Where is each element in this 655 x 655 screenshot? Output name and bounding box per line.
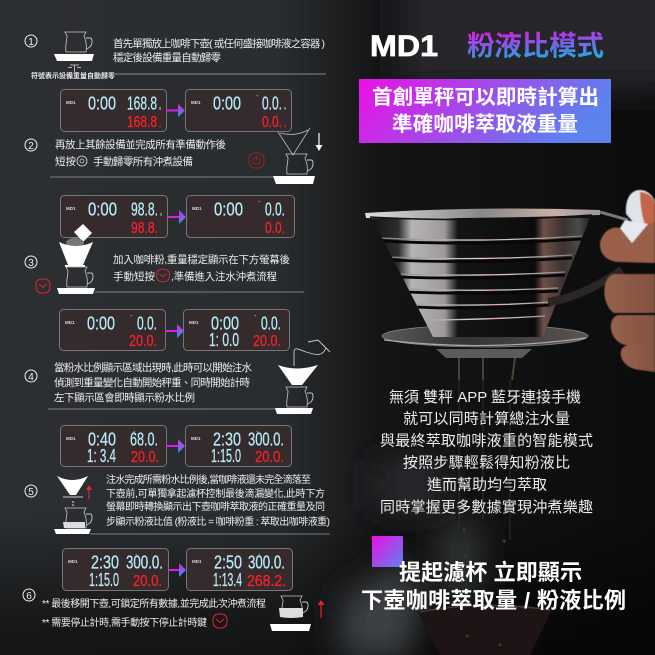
display: after: 268.2. (247, 573, 286, 590)
display: after (184, 310, 290, 350)
dripper cone (372, 218, 590, 337)
step 2 text: 再放上其餘設備並完成所有準備動作後 (55, 138, 226, 151)
display: before: 1:15.0 (89, 570, 119, 590)
banner (359, 79, 611, 143)
step 5 text (106, 473, 330, 528)
display: before: 0.0. (137, 314, 157, 334)
display: after: + (254, 313, 257, 318)
callout: lift dripper: 提起濾杯 立即顯示 (399, 560, 582, 585)
step 5 text: 下壺前,可單獨拿起濾杯控制最後滴漏變化,此時下方 (106, 487, 325, 500)
step 2 text (55, 138, 226, 168)
display: before: 0:40 (88, 430, 116, 450)
step 4 text: 偵測到重量變化自動開始秤重、同時開始計時 (54, 376, 250, 389)
dripper stems (459, 358, 515, 380)
display: after: g (284, 105, 286, 110)
display: before (62, 548, 168, 590)
display: after: 0:00 (213, 94, 241, 114)
display: before: g (159, 123, 161, 128)
display: before: 98.8. (131, 200, 158, 220)
step 6 text: ** 需要停止計時,需手動按下停止計時鍵 (42, 616, 207, 629)
display: after (186, 548, 292, 590)
display: after: 0:00 (214, 200, 243, 220)
display: after: 300.0. (248, 552, 285, 572)
title: MD1: MD1 (370, 30, 438, 63)
display: before (60, 426, 166, 466)
display: after: + (258, 199, 261, 204)
display: after: + (258, 552, 261, 557)
step 5 (25, 473, 330, 534)
display pair 5 (62, 548, 292, 590)
display: before: 0:00 (88, 94, 116, 114)
arrow (168, 563, 186, 577)
step number 1: 1 (28, 37, 34, 48)
icon: carafe lifted from scale (270, 596, 311, 631)
text block: right description (380, 389, 593, 516)
display: before: MD1 (66, 206, 76, 211)
text block: right description: 按照步驟輕鬆得知粉液比 (403, 454, 570, 472)
display: before: 20.0. (133, 573, 162, 590)
display: after: 2:50 (214, 552, 242, 572)
display pair 3 (60, 310, 290, 350)
icon: timer (36, 279, 50, 293)
display: before: MD1 (66, 436, 76, 441)
drip strands (459, 380, 510, 540)
step 1 text (113, 37, 325, 64)
display: after: 300.0. (248, 430, 284, 450)
display: after: 0:00 (211, 314, 239, 334)
step number 3: 3 (28, 258, 34, 269)
display: before: g (160, 211, 162, 216)
display: after: 0.0. (265, 220, 285, 237)
display: after: g (284, 123, 286, 128)
step number 5: 5 (28, 487, 34, 498)
step 3 text: 加入咖啡粉,重量穩定顯示在下方螢幕後 (113, 253, 290, 266)
icon: carafe on scale (54, 32, 94, 61)
dripper saucer (382, 325, 588, 347)
display: after: 0.0. (262, 114, 282, 131)
display: before: 2:30 (91, 552, 119, 572)
display: before: 168.8 (127, 114, 157, 131)
step 3 text: 手動短按 (113, 270, 155, 283)
display pair 2 (60, 196, 294, 238)
step number 6: 6 (26, 591, 32, 602)
step 6 text (42, 597, 266, 629)
display: before: g (159, 105, 161, 110)
step 4 text (54, 361, 252, 404)
display: after: 20.0. (253, 333, 281, 350)
icon: timer (213, 614, 227, 628)
display: before: 1: 3.4 (87, 446, 116, 466)
arrow (166, 439, 185, 453)
display: after (186, 426, 292, 466)
display: before: MD1 (65, 320, 75, 325)
display: before: 168.8 (127, 94, 157, 114)
callout: lift dripper (361, 536, 626, 613)
text block: right description: 就可以同時計算總注水量 (403, 410, 570, 428)
step 1 (25, 32, 326, 80)
display: before: + (133, 429, 136, 434)
dripper handle (600, 212, 628, 220)
display: before: + (130, 313, 133, 318)
step 3 text: ,準備進入注水沖煮流程 (171, 270, 278, 283)
step 1 text: 首先單獨放上咖啡下壺( 或任何盛接咖啡液之容器 ) (113, 37, 325, 50)
step number 2 (25, 139, 37, 152)
display pair 1 (60, 90, 292, 132)
display: before (60, 90, 166, 132)
step 6 text: ** 最後移開下壺,可鎖定所有數據,並完成此次沖煮流程 (42, 597, 266, 610)
icon: power button (249, 153, 264, 168)
dripper rim (365, 209, 600, 218)
step 3 text (113, 253, 290, 283)
step 4 text: 左下顯示區會即時顯示粉水比例 (54, 391, 195, 404)
step 5 text: 螢幕即時轉換顯示出下壺咖啡萃取液的正確重量及同 (106, 500, 325, 513)
banner: 首創單秤可以即時計算出 (372, 85, 599, 109)
text block: right description: 同時掌握更多數據實現沖煮樂趣 (380, 498, 593, 516)
step number 4 (25, 370, 37, 383)
icon: pouring kettle (275, 340, 330, 414)
icon: red up arrow (318, 600, 324, 618)
display: after: 1:15.0 (211, 446, 241, 466)
display: after: 1:13.4 (213, 570, 242, 590)
icon: lifted dripper and carafe (54, 476, 92, 534)
display: before: 300.0. (126, 552, 163, 572)
display: before: MD1 (68, 559, 78, 564)
hand: fingers (600, 190, 655, 372)
step 2 text: 手動歸零所有沖煮設備 (93, 155, 193, 168)
display: after: 1: 0.0 (209, 330, 239, 350)
display: after (186, 196, 294, 238)
display: before: 0:00 (87, 314, 115, 334)
icon: dripper on carafe (273, 128, 315, 184)
display: after: 0.0. (265, 200, 285, 220)
arrow (165, 324, 184, 338)
step 4 (25, 340, 330, 414)
display: after (186, 90, 292, 132)
display: after: + (256, 429, 259, 434)
step 2 text: 短按 (55, 155, 76, 168)
display: after: 2:30 (213, 430, 241, 450)
icon: red up arrow (86, 485, 92, 499)
photo: kalita dripper held by hand (365, 190, 655, 540)
step 4 text: 當粉水比例顯示區域出現時,此時可以開始注水 (54, 361, 252, 374)
step 2 (25, 128, 322, 184)
step number 6 (23, 589, 35, 602)
step number 1 (25, 35, 37, 48)
display: before (60, 196, 168, 238)
step number 3 (25, 256, 37, 269)
tare note: 符號表示設備重量自動歸零 (31, 71, 115, 80)
icon: down arrow (316, 133, 322, 151)
step 5 text: 注水完成所需粉水比例後,當咖啡液還未完全滴落至 (106, 473, 311, 486)
step 1 text: 穩定後設備重量自動歸零 (113, 51, 222, 64)
text block: right description: 無須 雙秤 APP 藍牙連接手機 (389, 389, 581, 406)
step 5 text: 步顯示粉液比值 (粉液比 = 咖啡粉重 : 萃取出咖啡液重) (106, 515, 330, 528)
step 6 (23, 589, 324, 631)
display: before: + (135, 552, 138, 557)
title: ratio mode: 粉液比模式 (467, 30, 604, 61)
display: after: + (256, 93, 259, 98)
display: before: 20.0. (131, 449, 159, 466)
banner: 準確咖啡萃取液重量 (392, 113, 578, 136)
display: before: 68.0. (130, 430, 158, 450)
display: before (60, 310, 166, 350)
step number 4: 4 (28, 372, 34, 383)
photo: coffee dripping into glass (418, 528, 552, 655)
step number 2: 2 (28, 141, 34, 152)
text block: right description: 進而幫助均勻萃取 (427, 476, 547, 494)
display: after: 0.0. (261, 314, 281, 334)
text block: right description: 與最終萃取咖啡液重的智能模式 (380, 432, 593, 450)
display: after: MD1 (191, 100, 201, 105)
step 3 (25, 224, 304, 294)
display: before: 98.8. (131, 220, 158, 237)
arrow (168, 210, 186, 224)
display: after: MD1 (189, 320, 199, 325)
display: before: 0:00 (88, 200, 117, 220)
step number 5 (25, 485, 37, 498)
display: before: 20.0. (129, 333, 157, 350)
display: after: MD1 (192, 206, 202, 211)
icon: adding coffee grounds to dripper (57, 224, 95, 294)
display: after: MD1 (191, 436, 201, 441)
icon: tare symbol (68, 65, 81, 72)
display: after: 0.0. (262, 94, 282, 114)
display: after: MD1 (192, 559, 202, 564)
arrow (166, 104, 185, 117)
display pair 4 (60, 426, 292, 466)
display: after: 20.0. (255, 449, 284, 466)
callout: lift dripper: 下壺咖啡萃取量 / 粉液比例 (361, 588, 626, 613)
display: before: MD1 (66, 100, 76, 105)
